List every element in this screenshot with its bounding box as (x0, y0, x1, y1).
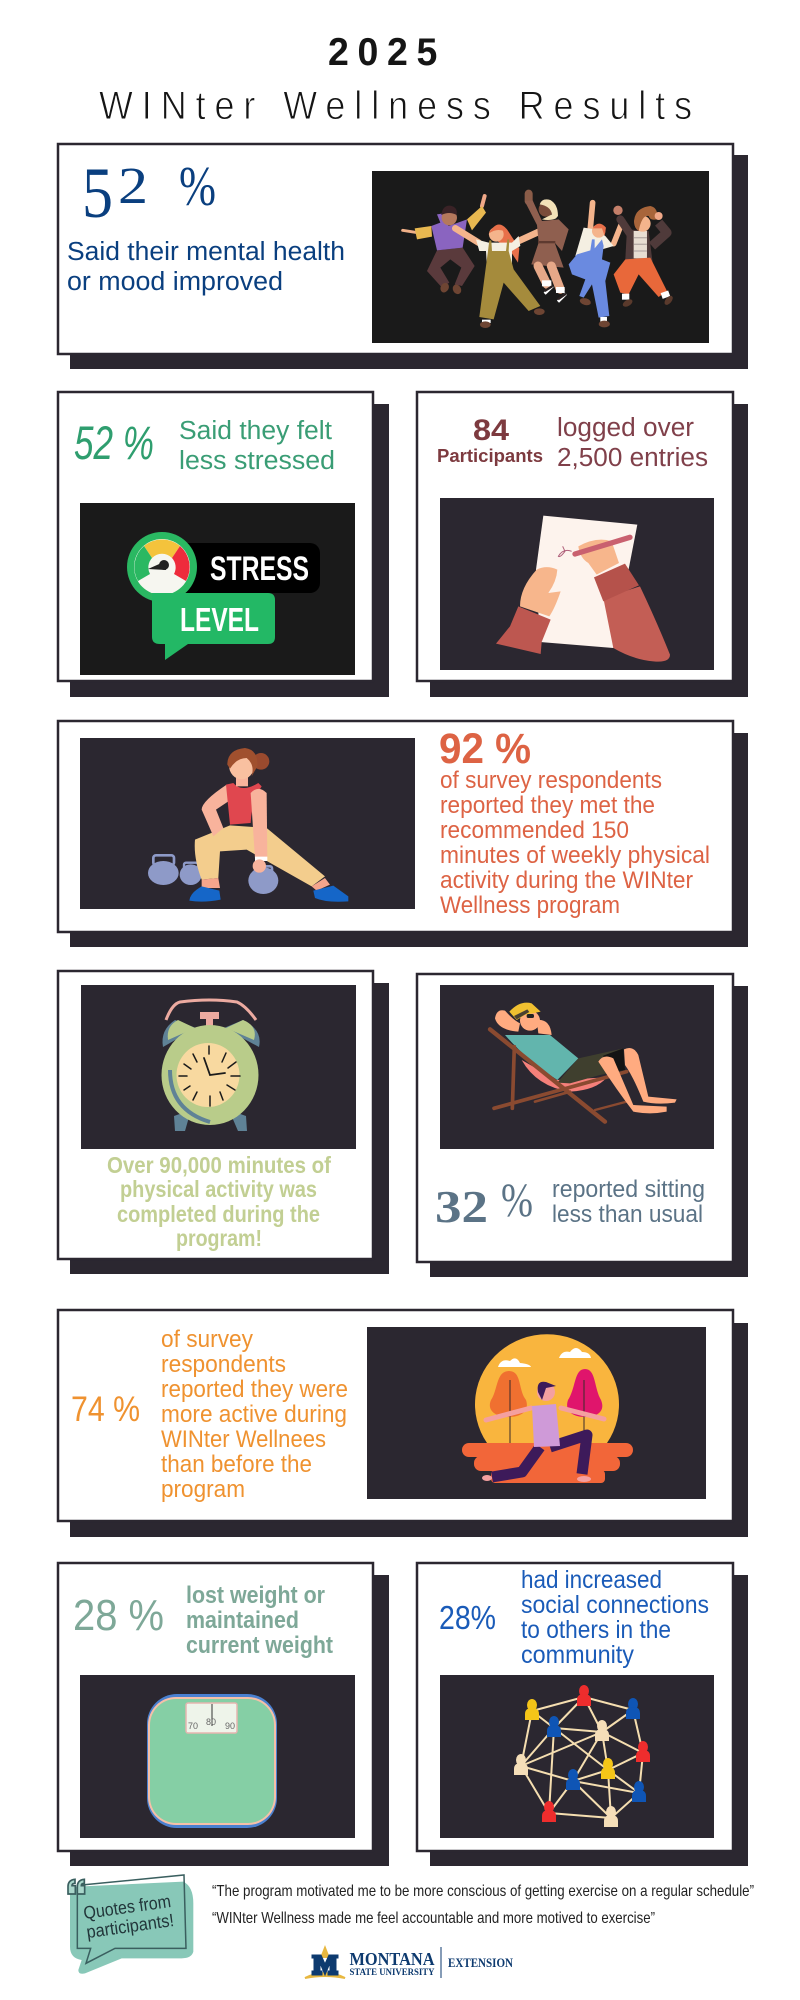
panel: weight (58, 1563, 389, 1866)
stat: 92 percent: 92 % (439, 725, 531, 773)
illustration: bathroom scale (80, 1675, 355, 1838)
stat: 84 participants (437, 414, 543, 466)
stat: 52 percent: 2 (118, 158, 148, 215)
text: 90,000 minutes (107, 1152, 331, 1251)
text: more active: than before the (161, 1451, 312, 1478)
stat: 52 percent: % (179, 156, 216, 218)
panel: social connections (417, 1563, 748, 1866)
text: less stressed: less stressed (179, 447, 335, 475)
text: more active: of survey (161, 1326, 253, 1353)
stat: 32 percent (435, 1174, 533, 1232)
stat: 52 percent: 5 (82, 153, 113, 233)
illustration: dancing people (372, 171, 709, 343)
text: social connections: had increased (521, 1566, 662, 1594)
illustration: bathroom scale: 80 (206, 1717, 216, 1727)
panel: more active (58, 1310, 748, 1537)
text: weight maintained: maintained (186, 1607, 299, 1634)
text: more active: respondents (161, 1351, 286, 1378)
text: mental health (67, 238, 345, 296)
text: weight maintained (186, 1582, 333, 1659)
text: social connections: to others in the (521, 1616, 671, 1644)
stat: 28 percent: 28 % (73, 1591, 164, 1640)
text: social connections: social connections (521, 1591, 709, 1619)
panel: mental health (58, 144, 748, 369)
text: less stressed: Said they felt (179, 417, 332, 445)
illustration: yoga outdoors (367, 1327, 706, 1499)
illustration: stress level gauge (80, 503, 355, 675)
title: 2025 (328, 31, 446, 74)
stat: 28 percent: 28% (439, 1599, 496, 1636)
stat: 84 participants: Participants (437, 446, 543, 466)
text: social connections: community (521, 1641, 634, 1669)
logo: Montana State University Extension: EXTENSION (448, 1955, 514, 1970)
text: weekly physical activity: minutes of weekly physical (440, 842, 710, 869)
stat: 52 percent: 52 % (74, 416, 154, 469)
text: 90,000 minutes: physical activity was (120, 1176, 317, 1202)
panel: physical activity (58, 721, 748, 947)
text: 90,000 minutes: Over 90,000 minutes of (107, 1152, 331, 1178)
text: logged entries (557, 414, 708, 472)
text: sitting less: less than usual (552, 1201, 703, 1228)
text: mental health: or mood improved (67, 268, 283, 296)
panel: participants (417, 392, 748, 697)
text: weekly physical activity: recommended 150 (440, 817, 629, 844)
illustration: man in deck chair (440, 985, 714, 1149)
text: weekly physical activity: Wellness program (440, 892, 620, 919)
illustration: people network (440, 1675, 714, 1838)
text: weekly physical activity (440, 767, 710, 919)
title (99, 31, 701, 128)
illustration: bathroom scale: 90 (225, 1721, 235, 1731)
illustration: alarm clock (81, 985, 356, 1149)
text: weight maintained: lost weight or (186, 1582, 325, 1609)
text: more active: more active during (161, 1401, 347, 1428)
text: more active (161, 1326, 348, 1503)
stat: 52 percent (82, 153, 216, 233)
participant quotes: “WINter Wellness made me feel accountable and more motived to exercise” (212, 1910, 655, 1927)
text: more active: reported they were (161, 1376, 348, 1403)
panel: minutes of activity (58, 971, 389, 1274)
logo: Montana State University Extension (305, 1945, 514, 1978)
stat: 74 percent: 74 % (71, 1390, 140, 1429)
text: logged entries: logged over (557, 414, 695, 442)
text: weight maintained: current weight (186, 1632, 333, 1659)
illustration: stress level gauge: STRESS (210, 550, 309, 588)
text: weekly physical activity: activity during the WINter (440, 867, 693, 894)
text: weekly physical activity: of survey respondents (440, 767, 662, 794)
stat: 32 percent: % (501, 1174, 533, 1227)
illustration: woman lunging with kettlebells (80, 738, 415, 909)
text: weekly physical activity: reported they met the (440, 792, 655, 819)
text: more active: program (161, 1476, 245, 1503)
illustration: bathroom scale: 70 (188, 1721, 198, 1731)
text: social connections (521, 1566, 709, 1669)
title: WINter Wellness Results (99, 84, 701, 128)
participant quotes (212, 1883, 754, 1927)
text: sitting less (552, 1176, 705, 1228)
callout: quotes from participants (68, 1875, 193, 1974)
illustration: stress level gauge: LEVEL (180, 601, 259, 638)
text: less stressed (179, 417, 335, 475)
illustration: hand writing on paper (440, 498, 714, 670)
panel: sitting less (417, 974, 748, 1277)
stat: 32 percent: 32 (435, 1181, 488, 1232)
text: more active: WINter Wellnees (161, 1426, 326, 1453)
logo: Montana State University Extension: STATE UNIVERSITY (350, 1968, 435, 1978)
text: 90,000 minutes: program! (176, 1225, 262, 1251)
logo: Montana State University Extension: MONTANA (350, 1949, 435, 1969)
text: sitting less: reported sitting (552, 1176, 705, 1203)
stat: 84 participants: 84 (473, 414, 509, 447)
callout: quotes from participants: Quotes from (82, 1891, 172, 1923)
text: 90,000 minutes: completed during the (117, 1201, 320, 1227)
text: mental health: Said their mental health (67, 238, 345, 266)
text: logged entries: 2,500 entries (557, 444, 708, 472)
panel: stress (58, 392, 389, 697)
callout: quotes from participants: participants! (85, 1910, 175, 1942)
